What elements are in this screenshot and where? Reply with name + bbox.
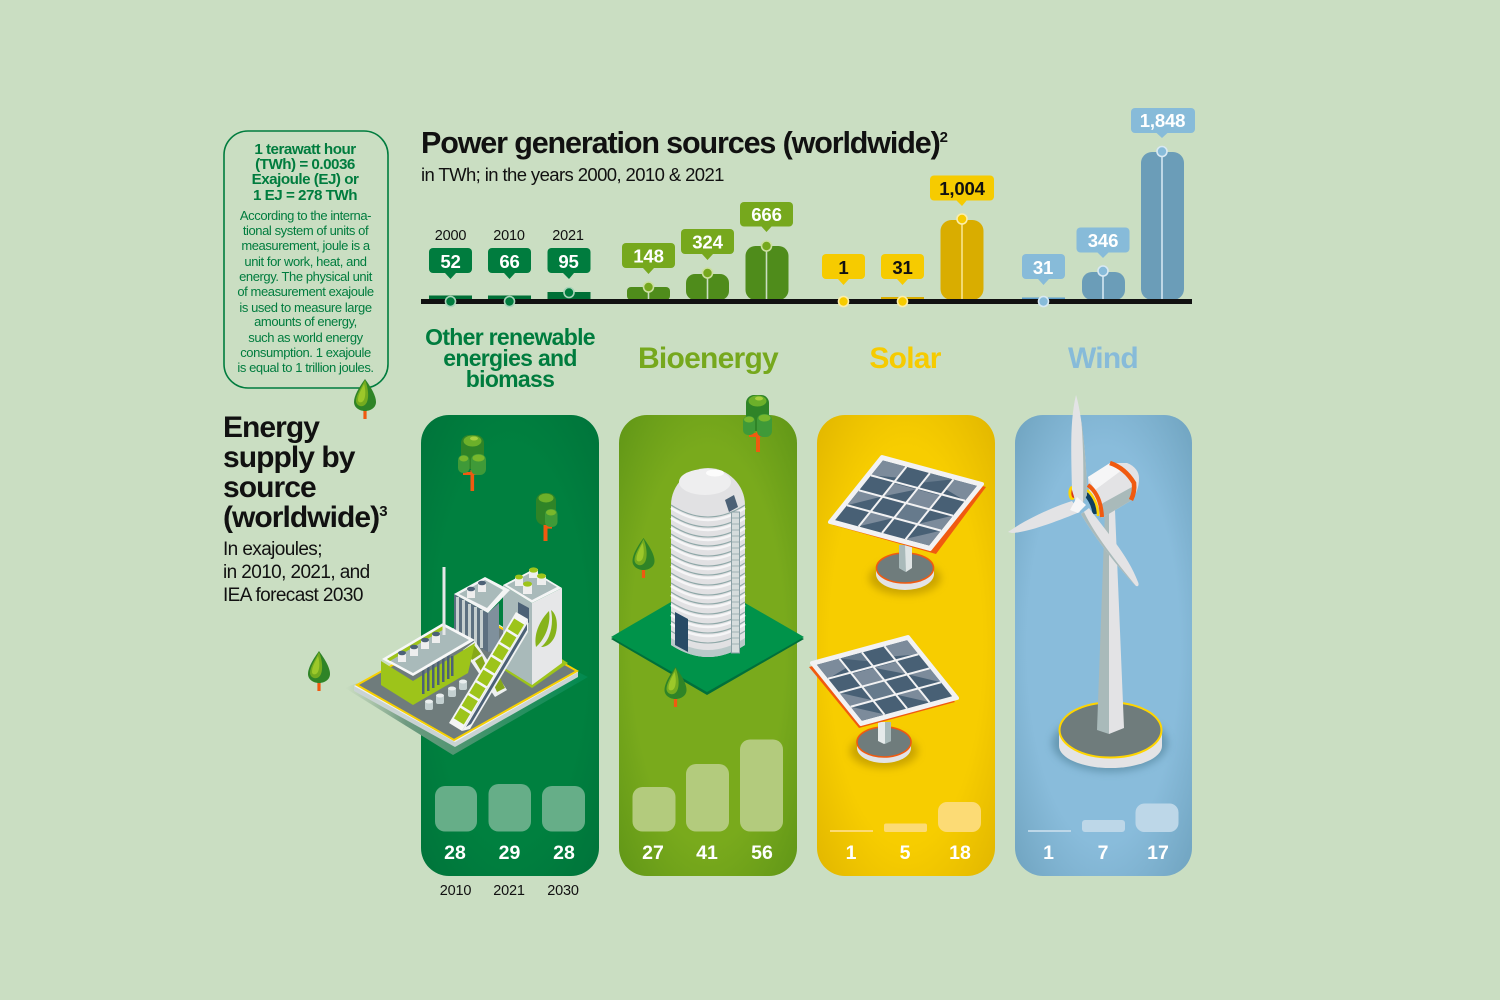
bars: wind supply xyxy=(1028,804,1178,832)
supply year labels: 2010 xyxy=(440,883,471,899)
supply values: 56 xyxy=(751,842,773,864)
stand post xyxy=(878,722,891,744)
supply values: 18 xyxy=(949,842,971,864)
info box heading: 1 terawatt hour xyxy=(254,141,356,158)
category heading: wind: Wind xyxy=(1068,342,1138,375)
panel: bioenergy background xyxy=(619,415,797,876)
bars: other renewables xyxy=(429,292,590,300)
stand base xyxy=(850,734,918,768)
tall building xyxy=(496,567,568,688)
category heading: solar: Solar xyxy=(869,342,942,375)
low green building xyxy=(381,623,475,705)
plant base platform xyxy=(354,614,578,747)
callout values: 95 xyxy=(558,251,579,272)
long conveyor xyxy=(449,612,528,731)
leaf logo xyxy=(535,610,557,647)
info box body text: tional system of units of xyxy=(243,223,369,238)
info box body text: unit for work, heat, and xyxy=(244,254,367,269)
supply values: 28 xyxy=(444,842,466,864)
info box body text: energy. The physical unit xyxy=(239,269,373,284)
year labels: 2010 xyxy=(493,228,525,244)
heading: energy supply by source: 3 xyxy=(379,503,388,520)
panel xyxy=(830,457,982,549)
bar chart: power generation xyxy=(421,108,1195,306)
callout values: 346 xyxy=(1088,230,1118,251)
category heading: other renewable energies and biomass: Other renewable xyxy=(425,324,595,350)
heading: energy supply by source: source xyxy=(223,471,316,504)
panel xyxy=(812,637,957,724)
panel shadow edge xyxy=(809,640,955,728)
callout values: 148 xyxy=(633,246,664,266)
silo hatch xyxy=(725,495,738,512)
storage tanks xyxy=(425,680,467,710)
heading: power generation sources: 2 xyxy=(940,129,948,146)
supply values: 1 xyxy=(1043,842,1054,864)
supply values: 29 xyxy=(499,842,520,864)
info box body text: is used to measure large xyxy=(239,300,372,315)
supply year labels xyxy=(440,883,579,899)
supply year labels: 2030 xyxy=(547,883,579,899)
green ground plate xyxy=(611,583,804,695)
callout values: 1,004 xyxy=(939,178,986,199)
info box body text: is equal to 1 trillion joules. xyxy=(237,360,374,375)
heading: energy supply by source: supply by xyxy=(223,441,356,474)
subtitle: power generation: in TWh; in the years 2000, 2010 & 2021 xyxy=(421,164,724,185)
icon: clump tree 2 xyxy=(536,493,558,541)
category heading: other renewable energies and biomass: energies and xyxy=(443,345,577,371)
value callouts: other renewables xyxy=(429,248,590,279)
callout values: 324 xyxy=(692,232,724,252)
icon: tree on bioenergy bottom xyxy=(664,667,686,707)
stand post xyxy=(899,545,912,572)
bar centre lines xyxy=(648,152,1162,299)
supply values: 17 xyxy=(1147,842,1169,864)
illustration: wind turbine xyxy=(1008,395,1168,772)
info box body text: such as world energy xyxy=(248,330,364,345)
category heading: bioenergy: Bioenergy xyxy=(638,342,779,375)
bars: wind xyxy=(1022,152,1184,300)
striped tower xyxy=(454,577,510,652)
supply values: 27 xyxy=(642,842,664,864)
bars: solar supply xyxy=(830,802,981,832)
bars: bioenergy supply xyxy=(632,740,783,832)
year labels xyxy=(435,228,584,244)
category heading: other renewable energies and biomass: biomass xyxy=(466,366,554,392)
supply values: 28 xyxy=(553,842,575,864)
bar chart: energy supply xyxy=(435,740,1178,899)
info box body text: consumption. 1 exajoule xyxy=(240,345,371,360)
icon: clump tree 1 xyxy=(458,435,486,491)
info box heading: 1 EJ = 278 TWh xyxy=(253,187,357,204)
panel: wind background xyxy=(1015,415,1192,876)
icon: clump tree on bioenergy panel xyxy=(743,395,772,452)
info box body text: According to the interna- xyxy=(240,208,371,223)
panel shadow edge xyxy=(833,458,986,554)
heading: power generation sources: Power generation sources (worldwide) xyxy=(421,126,940,160)
panel: solar background xyxy=(817,415,995,876)
silo rings xyxy=(671,505,745,643)
info box heading: (TWh) = 0.0036 xyxy=(255,156,355,173)
subtitle: energy supply: in 2010, 2021, and xyxy=(223,562,370,583)
illustration: solar panel bottom xyxy=(809,637,957,768)
info box: terawatt hour definition xyxy=(224,131,388,388)
turbine blades xyxy=(1008,395,1139,586)
year labels: 2021 xyxy=(552,228,584,244)
value callouts: solar xyxy=(822,176,994,285)
illustration: biomass plant xyxy=(345,567,588,755)
heading: energy supply by source: (worldwide) xyxy=(223,501,388,534)
turbine base xyxy=(1052,714,1168,772)
turbine tower xyxy=(1097,510,1109,734)
silo body xyxy=(671,468,745,657)
illustration: solar panel top xyxy=(830,457,986,595)
callout values xyxy=(440,110,1185,278)
callout values: 666 xyxy=(751,204,782,225)
illustration: silo xyxy=(611,468,804,695)
silo ladder xyxy=(732,512,740,653)
info box heading: Exajoule (EJ) or xyxy=(252,171,359,188)
subtitle: energy supply: In exajoules; xyxy=(223,539,322,560)
supply values: 1 xyxy=(846,842,857,864)
icon: tree left of biomass plant xyxy=(308,651,330,691)
supply values: 5 xyxy=(900,842,911,864)
callout values: 31 xyxy=(1033,257,1053,278)
callout values: 52 xyxy=(440,251,461,272)
callout values: 1 xyxy=(838,257,849,278)
bars: bioenergy xyxy=(627,246,788,300)
icon: tree on bioenergy left xyxy=(632,538,654,578)
heading: energy supply by source: Energy xyxy=(223,411,320,444)
supply values xyxy=(444,842,1169,864)
supply values: 41 xyxy=(696,842,718,864)
year labels: 2000 xyxy=(435,228,466,244)
turbine nacelle xyxy=(1068,463,1139,518)
info box body text: measurement, joule is a xyxy=(241,238,371,253)
callout values: 31 xyxy=(892,257,913,278)
axis line xyxy=(421,299,1192,304)
supply year labels: 2021 xyxy=(493,883,525,899)
data dots xyxy=(446,146,1167,306)
bars: solar xyxy=(881,220,984,300)
bars: other renewables supply xyxy=(435,784,585,832)
small conveyor xyxy=(463,641,507,697)
subtitle: energy supply: IEA forecast 2030 xyxy=(223,585,363,606)
callout values: 66 xyxy=(499,251,520,272)
value callouts: bioenergy xyxy=(622,202,793,274)
silo door xyxy=(675,612,688,652)
panel: other renewables background xyxy=(421,415,599,876)
silo ring highlights xyxy=(671,508,745,636)
stand base xyxy=(869,561,941,595)
info box body text: of measurement exajoule xyxy=(237,284,374,299)
value callouts: wind xyxy=(1022,108,1195,285)
icon: tree on info box xyxy=(354,379,376,419)
plant ground shadow xyxy=(345,672,588,755)
supply values: 7 xyxy=(1098,842,1108,864)
chimney xyxy=(442,567,446,635)
info box body text: amounts of energy, xyxy=(254,314,357,329)
callout values: 1,848 xyxy=(1140,110,1185,131)
